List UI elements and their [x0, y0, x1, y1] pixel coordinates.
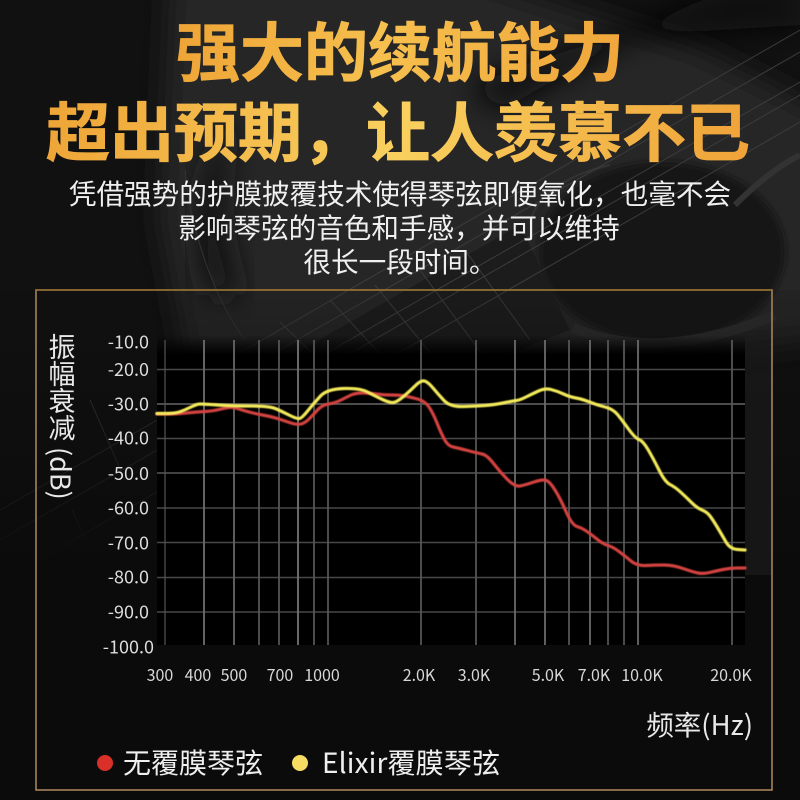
x-axis labels: 2.0K: [403, 662, 436, 686]
legend marker: red: [97, 755, 113, 771]
legend: [97, 742, 500, 782]
legend: Elixir覆膜琴弦: [322, 742, 500, 782]
x-axis labels: 5.0K: [532, 662, 565, 686]
x-axis labels: 20.0K: [710, 662, 752, 686]
fade to dark lower area: [0, 290, 800, 800]
horizontal grid: [157, 370, 745, 612]
y-axis labels: -30.0: [108, 390, 149, 416]
y-axis labels: -50.0: [108, 460, 149, 486]
y-axis title: 振幅衰减 (dB): [42, 333, 82, 500]
x-axis labels: 1000: [304, 662, 340, 686]
description text: [69, 172, 731, 280]
vertical grid: [165, 340, 732, 645]
y-axis labels: -40.0: [108, 424, 149, 450]
x-axis title: 频率(Hz): [646, 703, 753, 743]
x-axis labels: 7.0K: [578, 662, 611, 686]
y-axis labels: -20.0: [108, 356, 149, 382]
description text: 影响琴弦的音色和手感，并可以维持: [178, 206, 620, 246]
y-axis labels: -80.0: [108, 564, 149, 590]
y-axis labels: -90.0: [108, 598, 149, 624]
legend: 无覆膜琴弦: [123, 742, 263, 782]
x-axis labels: [147, 662, 752, 686]
panel: chart frame: [36, 290, 772, 790]
description text: 很长一段时间。: [303, 240, 497, 280]
y-axis labels: [103, 328, 154, 660]
title: [46, 3, 750, 175]
legend marker: yellow: [292, 755, 308, 771]
line: uncoated strings (red): [157, 393, 745, 573]
title line 2: 超出预期，让人羡慕不已: [46, 83, 750, 175]
title line 1: 强大的续航能力: [176, 3, 624, 95]
y-axis labels: -60.0: [108, 494, 149, 520]
chart plot area: [157, 335, 745, 645]
description text: 凭借强势的护膜披覆技术使得琴弦即便氧化，也毫不会: [69, 172, 731, 212]
y-axis labels: -70.0: [108, 530, 149, 556]
x-axis labels: 500: [221, 662, 247, 686]
x-axis labels: 3.0K: [458, 662, 491, 686]
soundhole: [539, 162, 785, 342]
y-axis labels: -10.0: [108, 328, 149, 354]
x-axis labels: 400: [185, 662, 211, 686]
y-axis labels: -100.0: [103, 634, 154, 660]
x-axis labels: 300: [147, 662, 173, 686]
line: Elixir coated strings (yellow): [157, 381, 745, 550]
x-axis labels: 700: [267, 662, 293, 686]
fretboard: [275, 225, 570, 365]
x-axis labels: 10.0K: [621, 662, 663, 686]
